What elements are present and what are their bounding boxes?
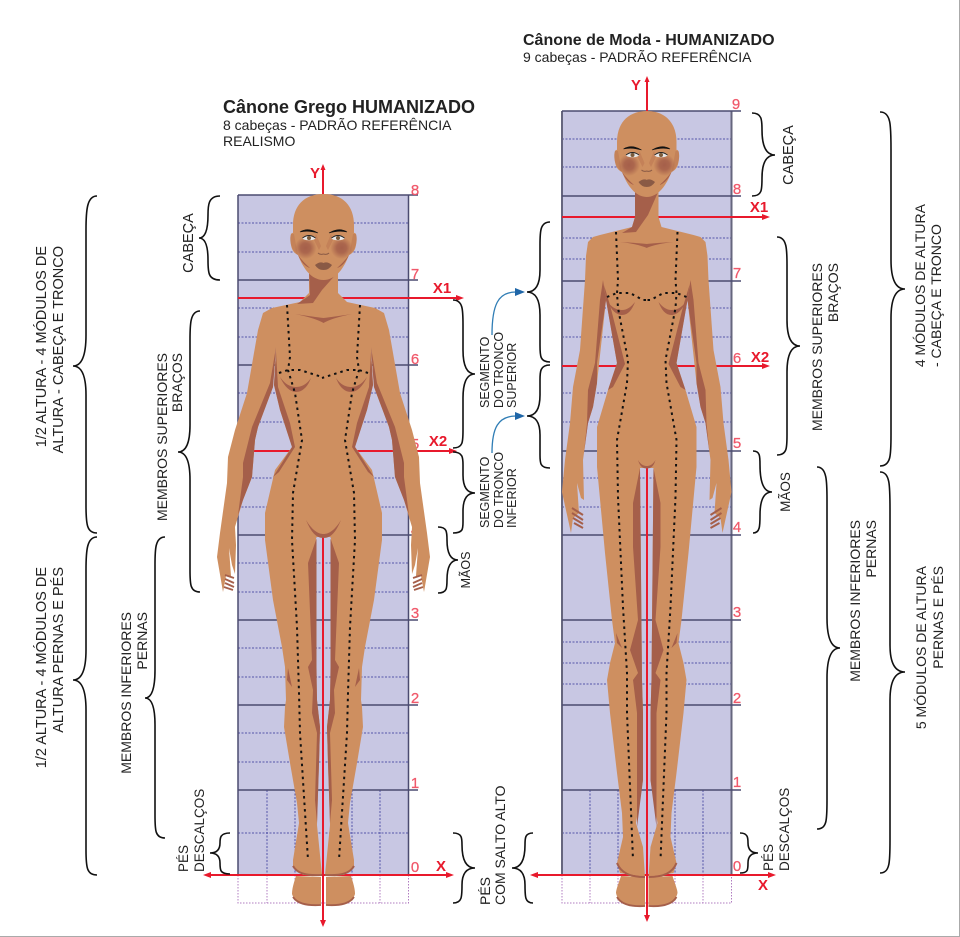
label: half height legs and feet [33,567,67,768]
label: left arms: MEMBROS SUPERIORES [154,353,170,521]
left grid numbers: 0 [411,859,419,876]
label: upper torso segment: SEGMENTO [478,336,492,408]
left axes: X [436,858,446,875]
label: left head: CABEÇA [181,213,197,273]
left grid numbers: 5 [411,436,419,453]
brace: right four modules [880,112,905,466]
left grid numbers [411,182,419,876]
brace: left lower torso segment [453,452,475,533]
label: right legs: MEMBROS INFERIORES [847,520,863,682]
label: left bare feet: DESCALÇOS [192,789,207,872]
brace: right head [752,113,775,196]
right grid numbers: 7 [733,265,741,282]
title: Cânone Grego [223,97,475,149]
label: lower torso segment: INFERIOR [505,468,519,528]
right grid numbers: 1 [733,774,741,791]
figure: fashion canon human figure [562,111,732,906]
label: left legs: MEMBROS INFERIORES [118,612,134,774]
label: right four modules [912,203,944,367]
left grid numbers: 4 [411,522,419,539]
neck shadow [297,270,338,304]
left grid numbers: 7 [411,266,419,283]
brace: left arms [178,311,200,592]
label: left legs: PERNAS [134,612,150,670]
label: half height head and torso: 1/2 ALTURA - 4 MÓDULOS DE [33,246,50,447]
brace: right upper torso segment [527,222,550,362]
brace: left legs [145,537,165,838]
label: right arms: BRAÇOS [825,263,841,322]
label: upper torso segment: SUPERIOR [505,343,519,408]
title: Cânone de Moda: Cânone de Moda - HUMANIZADO [523,32,775,49]
left grid numbers: 2 [411,690,419,707]
brace: left head [199,196,220,280]
label: lower torso segment: DO TRONCO [492,452,506,528]
label: half height legs and feet: 1/2 ALTURA - 4 MÓDULOS DE [33,567,50,768]
label: right five modules: 5 MÓDULOS DE ALTURA [913,565,929,729]
brace: right lower torso segment [527,365,550,468]
label: right five modules: PERNAS E PÉS [930,566,946,669]
right grid numbers: 2 [733,690,741,707]
label: left arms [154,353,185,521]
label: high heel feet: PÉS [477,877,493,905]
title: Cânone Grego: REALISMO [223,133,295,149]
left axes: X2 [429,433,447,450]
left axes [203,164,464,927]
right grid numbers [732,96,741,875]
label: half height legs and feet: ALTURA PERNAS E PÉS [50,567,67,733]
brace: left upper torso segment [453,300,475,448]
brace: right high heel feet [512,833,533,903]
right grid numbers: 6 [733,350,741,367]
right axes: X [758,877,768,894]
brace: left high heel feet [453,833,475,903]
brace: left hands [438,527,458,593]
label: right arms: MEMBROS SUPERIORES [809,263,825,431]
label: upper torso segment: DO TRONCO [492,332,506,408]
label: left hands: MÃOS [459,552,473,588]
label: upper torso segment [478,332,519,408]
left axes: X1 [433,280,451,297]
label: left legs [118,612,150,774]
label: high heel feet [477,785,508,905]
right grid numbers: 4 [733,519,741,536]
right grid numbers: 5 [733,435,741,452]
label: half height head and torso [33,246,67,453]
label: right bare feet: PÉS [761,844,776,871]
label: left bare feet: PÉS [176,845,191,872]
brace: left bare feet [210,833,230,874]
left grid numbers: 8 [411,182,419,199]
left grid numbers: 6 [411,351,419,368]
title: Cânone de Moda [523,32,775,65]
label: left arms: BRAÇOS [169,353,185,412]
left grid numbers: 3 [411,605,419,622]
title: Cânone Grego: Cânone Grego HUMANIZADO [223,97,475,117]
neck shadow [622,187,659,233]
brace: right five modules [880,472,905,873]
brace: right legs [817,467,840,829]
right grid numbers: 9 [732,96,740,113]
left axes: Y [310,165,320,182]
label: right head: CABEÇA [781,125,797,185]
right axes: Y [631,77,641,94]
brace: half height head and torso [73,196,97,533]
label: right four modules: 4 MÓDULOS DE ALTURA [912,203,928,367]
label: right four modules: - CABEÇA E TRONCO [928,224,944,367]
right measurement grid [562,111,741,903]
title: Cânone Grego: 8 cabeças - PADRÃO REFERÊNCIA [223,117,452,133]
label: half height head and torso: ALTURA - CABEÇA E TRONCO [51,246,67,453]
label: right bare feet [761,788,792,871]
arrow: upper torso segment pointer [492,288,525,335]
brace: right bare feet [740,833,758,873]
label: right legs [847,520,879,682]
right axes [530,76,776,922]
label: lower torso segment: SEGMENTO [478,456,492,528]
label: right hands: MÃOS [778,472,793,512]
title: Cânone de Moda: 9 cabeças - PADRÃO REFERÊNCIA [523,49,752,65]
label: lower torso segment [478,452,519,528]
left measurement grid [238,195,418,903]
left grid numbers: 1 [411,775,419,792]
figure: Greek canon human figure [217,194,430,905]
brace: half height legs and feet [73,537,97,875]
right grid numbers: 3 [733,604,741,621]
label: left bare feet [176,789,207,872]
brace: right arms [777,237,800,455]
label: right five modules [913,565,946,729]
arrow: lower torso segment pointer [492,412,525,453]
right grid numbers: 8 [733,181,741,198]
right axes: X2 [751,349,769,366]
right grid numbers: 0 [733,858,741,875]
right axes: X1 [750,199,768,216]
brace: right hands [753,451,772,533]
label: right arms [809,263,841,431]
label: high heel feet: COM SALTO ALTO [492,785,508,905]
label: right legs: PERNAS [863,520,879,578]
label: right bare feet: DESCALÇOS [777,788,792,871]
